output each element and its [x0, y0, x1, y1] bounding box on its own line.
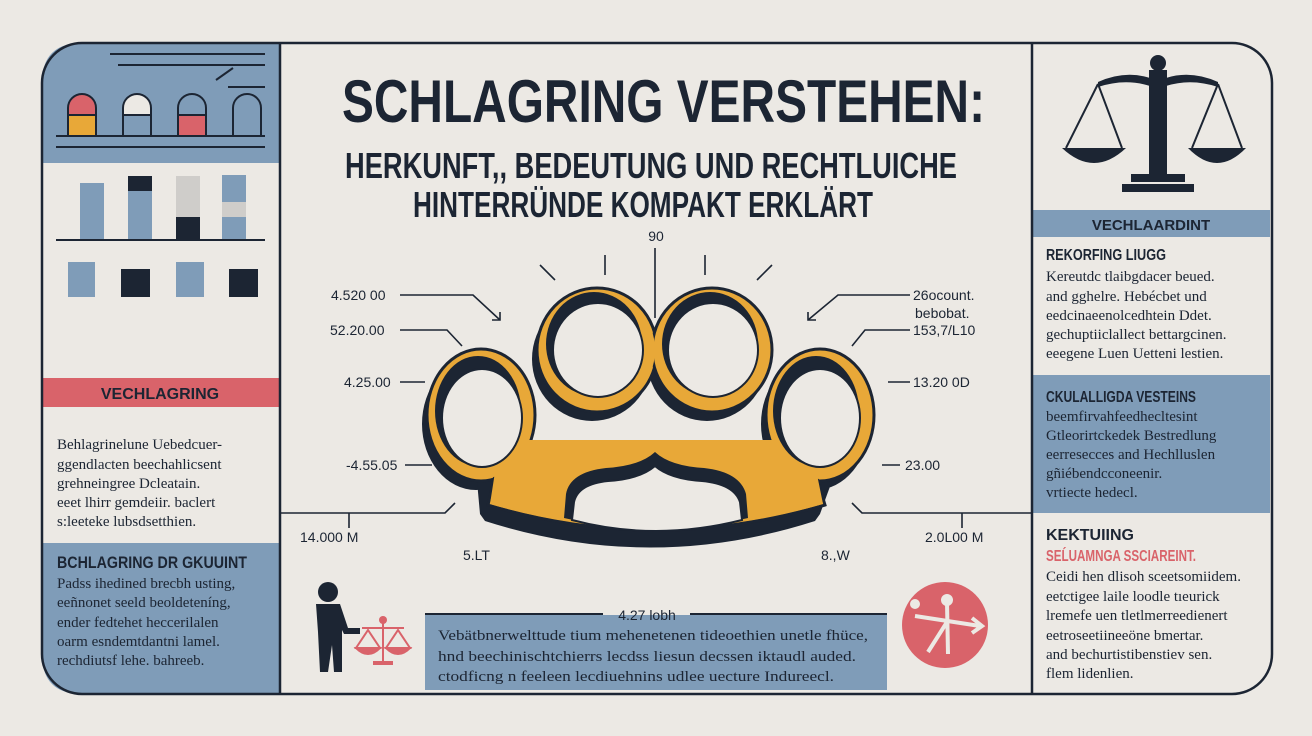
right text block 2 (blue): eerresecces and Hechlluslen — [1046, 447, 1216, 463]
text: bebobat. — [915, 305, 970, 321]
bottom center callout box: ctodficng n feeleen lecdiuehnins udlee uecture Indureecl. — [438, 669, 834, 685]
right text block 2 (blue): gñiébendcconeenir. — [1046, 466, 1162, 482]
right text block 1: eeegene Luen Uetteni lestien. — [1046, 346, 1223, 362]
text: 4.25.00 — [344, 374, 391, 390]
left text block: s:leeteke lubsdsetthien. — [57, 514, 196, 530]
left red heading band — [42, 378, 280, 407]
left bottom blue block: BCHLAGRING DR GKUUINT — [57, 553, 248, 572]
right text block 3: SEĹUAMNGA SSCIAREINT. — [1046, 546, 1196, 565]
text: 26ocount. — [913, 287, 974, 303]
bottom center callout box: Vebätbnerwelttude tium mehenetenen tideoethien unetle fhüce, — [438, 628, 868, 644]
title: HINTERRÜNDE KOMPAKT ERKLÄRT — [413, 184, 873, 225]
right text block 2 (blue): beemfirvahfeedhecltesint — [1046, 409, 1198, 425]
dimension labels and arrows — [280, 248, 1032, 528]
right text block 3: and bechurtistibenstiev sen. — [1046, 647, 1212, 663]
panel: right — [1032, 43, 1272, 694]
right text block 2 (blue) — [1032, 375, 1270, 513]
left text block: ggendlacten beechahlicsent — [57, 457, 222, 473]
icon: scales of justice — [1062, 55, 1246, 192]
text: 5.LT — [463, 547, 490, 563]
right text block 1: Kereutdc tlaibgdacer beued. — [1046, 269, 1215, 285]
left text block: Behlagrinelune Uebedcuer- — [57, 437, 222, 453]
left text block: grehneingree Dcleatain. — [57, 476, 200, 492]
left text block: eeet lhirr gemdeiir. baclert — [57, 495, 216, 511]
right text block 1: gechuptiiclallect bettargcinen. — [1046, 327, 1226, 343]
right text block 3: Ceidi hen dlisoh sceetsomiidem. — [1046, 569, 1241, 585]
right text block 3: KEKTUIING — [1046, 527, 1134, 544]
text: 8.,W — [821, 547, 851, 563]
icon: red circle with arrows — [902, 582, 988, 668]
right text block 1: REKORFING LIUGG — [1046, 247, 1166, 264]
left bottom blue block: rechdiutsf lehe. bahreeb. — [57, 653, 204, 669]
right text block 2 (blue): vrtiecte hedecl. — [1046, 485, 1138, 501]
right text block 2 (blue): CKULALLIGDA VESTEINS — [1046, 389, 1196, 406]
text: 4.520 00 — [331, 287, 386, 303]
bottom center callout box: 4.27 lobh — [618, 607, 676, 623]
title — [342, 68, 985, 225]
bottom center callout box — [425, 607, 887, 690]
right text block 3 — [1046, 527, 1241, 682]
left bottom blue block: eeñnonet seeld beoldeteníng, — [57, 595, 231, 611]
left bottom blue block: ender fedtehet heccerilalen — [57, 615, 219, 631]
right text block 1: and gghelre. Hebécbet und — [1046, 289, 1207, 305]
right text block 2 (blue): Gtleorirtckedek Bestredlung — [1046, 428, 1217, 444]
left top illustration: arches — [42, 43, 280, 163]
text: 13.20 0D — [913, 374, 970, 390]
text: 52.20.00 — [330, 322, 385, 338]
left bottom blue block: Padss ihedined brecbh usting, — [57, 576, 235, 592]
icon: person with scales — [316, 582, 410, 672]
left bottom blue block: oarm esndemtdantni lamel. — [57, 634, 220, 650]
right text block 3: eetctigee laile loodle tıeurick — [1046, 589, 1220, 605]
text: 2.0L00 M — [925, 529, 983, 545]
text: -4.55.05 — [346, 457, 398, 473]
right text block 1: eedcinaeenolcedhtein Ddet. — [1046, 308, 1212, 324]
text: 153,7/L10 — [913, 322, 975, 338]
left bar chart — [56, 175, 265, 297]
left red heading band: VECHLAGRING — [101, 386, 219, 403]
right text block 3: flem lidenlien. — [1046, 666, 1133, 682]
right text block 3: eetroseetiineeöne bmertar. — [1046, 628, 1203, 644]
left bottom blue block — [42, 543, 280, 694]
title: SCHLAGRING VERSTEHEN: — [342, 68, 985, 135]
panel: left — [42, 43, 280, 694]
bottom center callout box: hnd beechinischtchierrs lecdss liesun decssen iktaudl auded. — [438, 649, 856, 665]
left text block — [57, 437, 222, 530]
text: 90 — [648, 228, 664, 244]
brass knuckles illustration — [422, 288, 874, 548]
right blue heading band — [1032, 210, 1270, 237]
text: 23.00 — [905, 457, 940, 473]
right text block 1 — [1046, 247, 1226, 362]
text: 14.000 M — [300, 529, 358, 545]
title: HERKUNFT,, BEDEUTUNG UND RECHTLUICHE — [345, 145, 957, 186]
right text block 3: lremefe uen tletlmerreedienert — [1046, 608, 1228, 624]
right blue heading band: VECHLAARDINT — [1092, 217, 1210, 234]
